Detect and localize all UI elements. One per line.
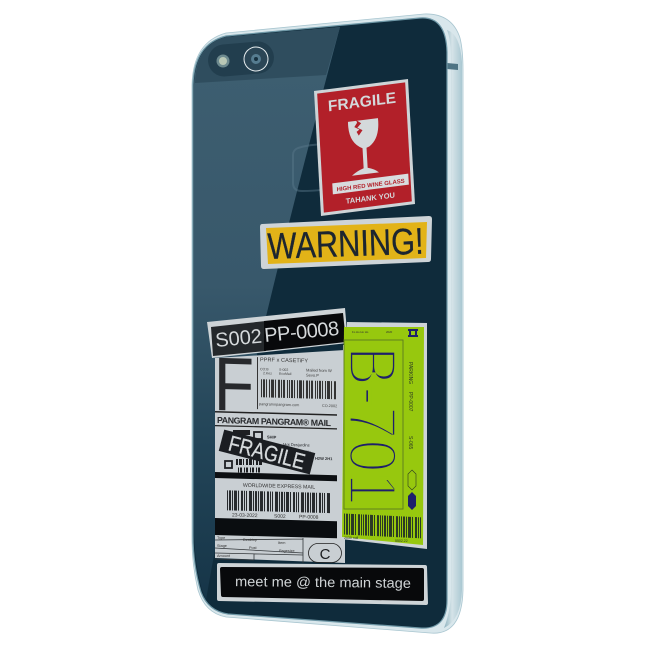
ticket footer: 2030 null — [344, 536, 358, 540]
S002 text: S002 — [214, 326, 263, 352]
form labels: Amount — [217, 554, 231, 558]
form labels: Post — [249, 546, 258, 550]
date and codes: 23-03-2022 — [232, 512, 258, 519]
info columns: Mailed from W — [306, 367, 332, 373]
date and codes: S002 — [274, 514, 286, 520]
form table — [215, 538, 303, 563]
icon: outline hexagon badge — [408, 470, 416, 490]
QR code — [225, 430, 262, 470]
sticker: fragile wine glass: HIGH RED WINE GLASS — [337, 179, 405, 193]
shipping address: Mot Desjardins — [283, 442, 310, 448]
info columns: Sevo.P — [306, 372, 319, 378]
info columns: S-002 — [279, 368, 288, 372]
flash — [216, 54, 230, 68]
form labels: Desktop — [243, 538, 257, 542]
form labels — [217, 536, 295, 558]
meet me text: meet me @ the main stage — [235, 573, 411, 591]
website text: pangramnpangram.com — [259, 402, 299, 407]
info columns: EcoMail — [279, 372, 292, 376]
shipping label sheet: CO.2002 — [322, 404, 337, 408]
side band — [447, 63, 458, 70]
shipping address — [267, 434, 333, 461]
thank you text: TAHANK YOU — [346, 190, 395, 206]
warning text: WARNING! — [267, 221, 424, 267]
small top text: 2020 — [386, 330, 393, 334]
big letter F: F — [214, 343, 254, 428]
sticker: warning — [260, 216, 432, 269]
thick line — [215, 411, 337, 416]
sticker: black code label — [207, 308, 348, 358]
shipping address: SHIP — [267, 434, 277, 440]
info columns: CO:B — [260, 367, 269, 371]
parking codes — [407, 362, 413, 450]
glass label strip — [332, 174, 409, 194]
icon: solid hexagon badge — [408, 492, 416, 510]
pangram heading: PANGRAM PANGRAM® MAIL — [217, 415, 332, 428]
fragile heading: FRAGILE — [328, 90, 396, 115]
date and codes — [232, 512, 319, 521]
form labels: Type — [217, 536, 225, 540]
inner frame — [344, 340, 403, 509]
form labels: Item — [278, 541, 285, 545]
fingerprint sensor — [293, 144, 337, 191]
ticket footer: 5502.22 — [395, 539, 408, 543]
right case edge — [444, 30, 462, 628]
sticker: small fragile: FRAGILE — [226, 431, 308, 474]
info columns: 2.Kez — [263, 371, 272, 376]
worldwide heading: WORLDWIDE EXPRESS MAIL — [243, 483, 315, 491]
glass sheen — [194, 27, 340, 600]
form labels: Pagesize — [279, 549, 295, 553]
barcode 3 — [344, 524, 421, 528]
parking codes: PP-0007 — [407, 392, 413, 412]
parking codes: PARKING — [407, 362, 413, 384]
barcode 2 — [227, 500, 330, 503]
icon: broken wine glass — [348, 117, 381, 176]
form labels: Stage — [217, 544, 227, 548]
brand header: PPRF x CASETiFY — [260, 357, 308, 365]
C badge: C — [320, 546, 331, 563]
shipping label sheet — [214, 343, 345, 563]
sticker: fragile wine glass — [314, 79, 415, 216]
C badge — [308, 544, 342, 563]
phone case — [192, 14, 463, 633]
date and codes: PP-0008 — [299, 514, 319, 521]
small top text — [352, 330, 393, 334]
ticket footer — [344, 536, 408, 543]
shipping address: Laval-de-Ville — [287, 449, 312, 455]
shipping address: H2W 2H1 — [315, 456, 333, 461]
icon: top badge — [408, 329, 418, 337]
info columns — [260, 366, 332, 378]
big B-701 text: B-701 — [334, 346, 411, 506]
PP-0008 text: PP-0008 — [263, 318, 340, 347]
camera band — [195, 27, 340, 83]
black bar — [215, 472, 337, 481]
parking codes: S-065 — [407, 436, 413, 450]
barcode 1 — [261, 388, 337, 390]
camera lens — [244, 46, 268, 72]
clear case shell — [192, 14, 463, 633]
sticker: green B-701 parking ticket — [334, 322, 427, 549]
small top text: Fo Ho Ho Ho — [352, 330, 369, 334]
phone back — [193, 18, 447, 628]
black bar — [215, 518, 337, 538]
sticker: meet me — [217, 563, 428, 605]
camera housing — [207, 40, 275, 78]
